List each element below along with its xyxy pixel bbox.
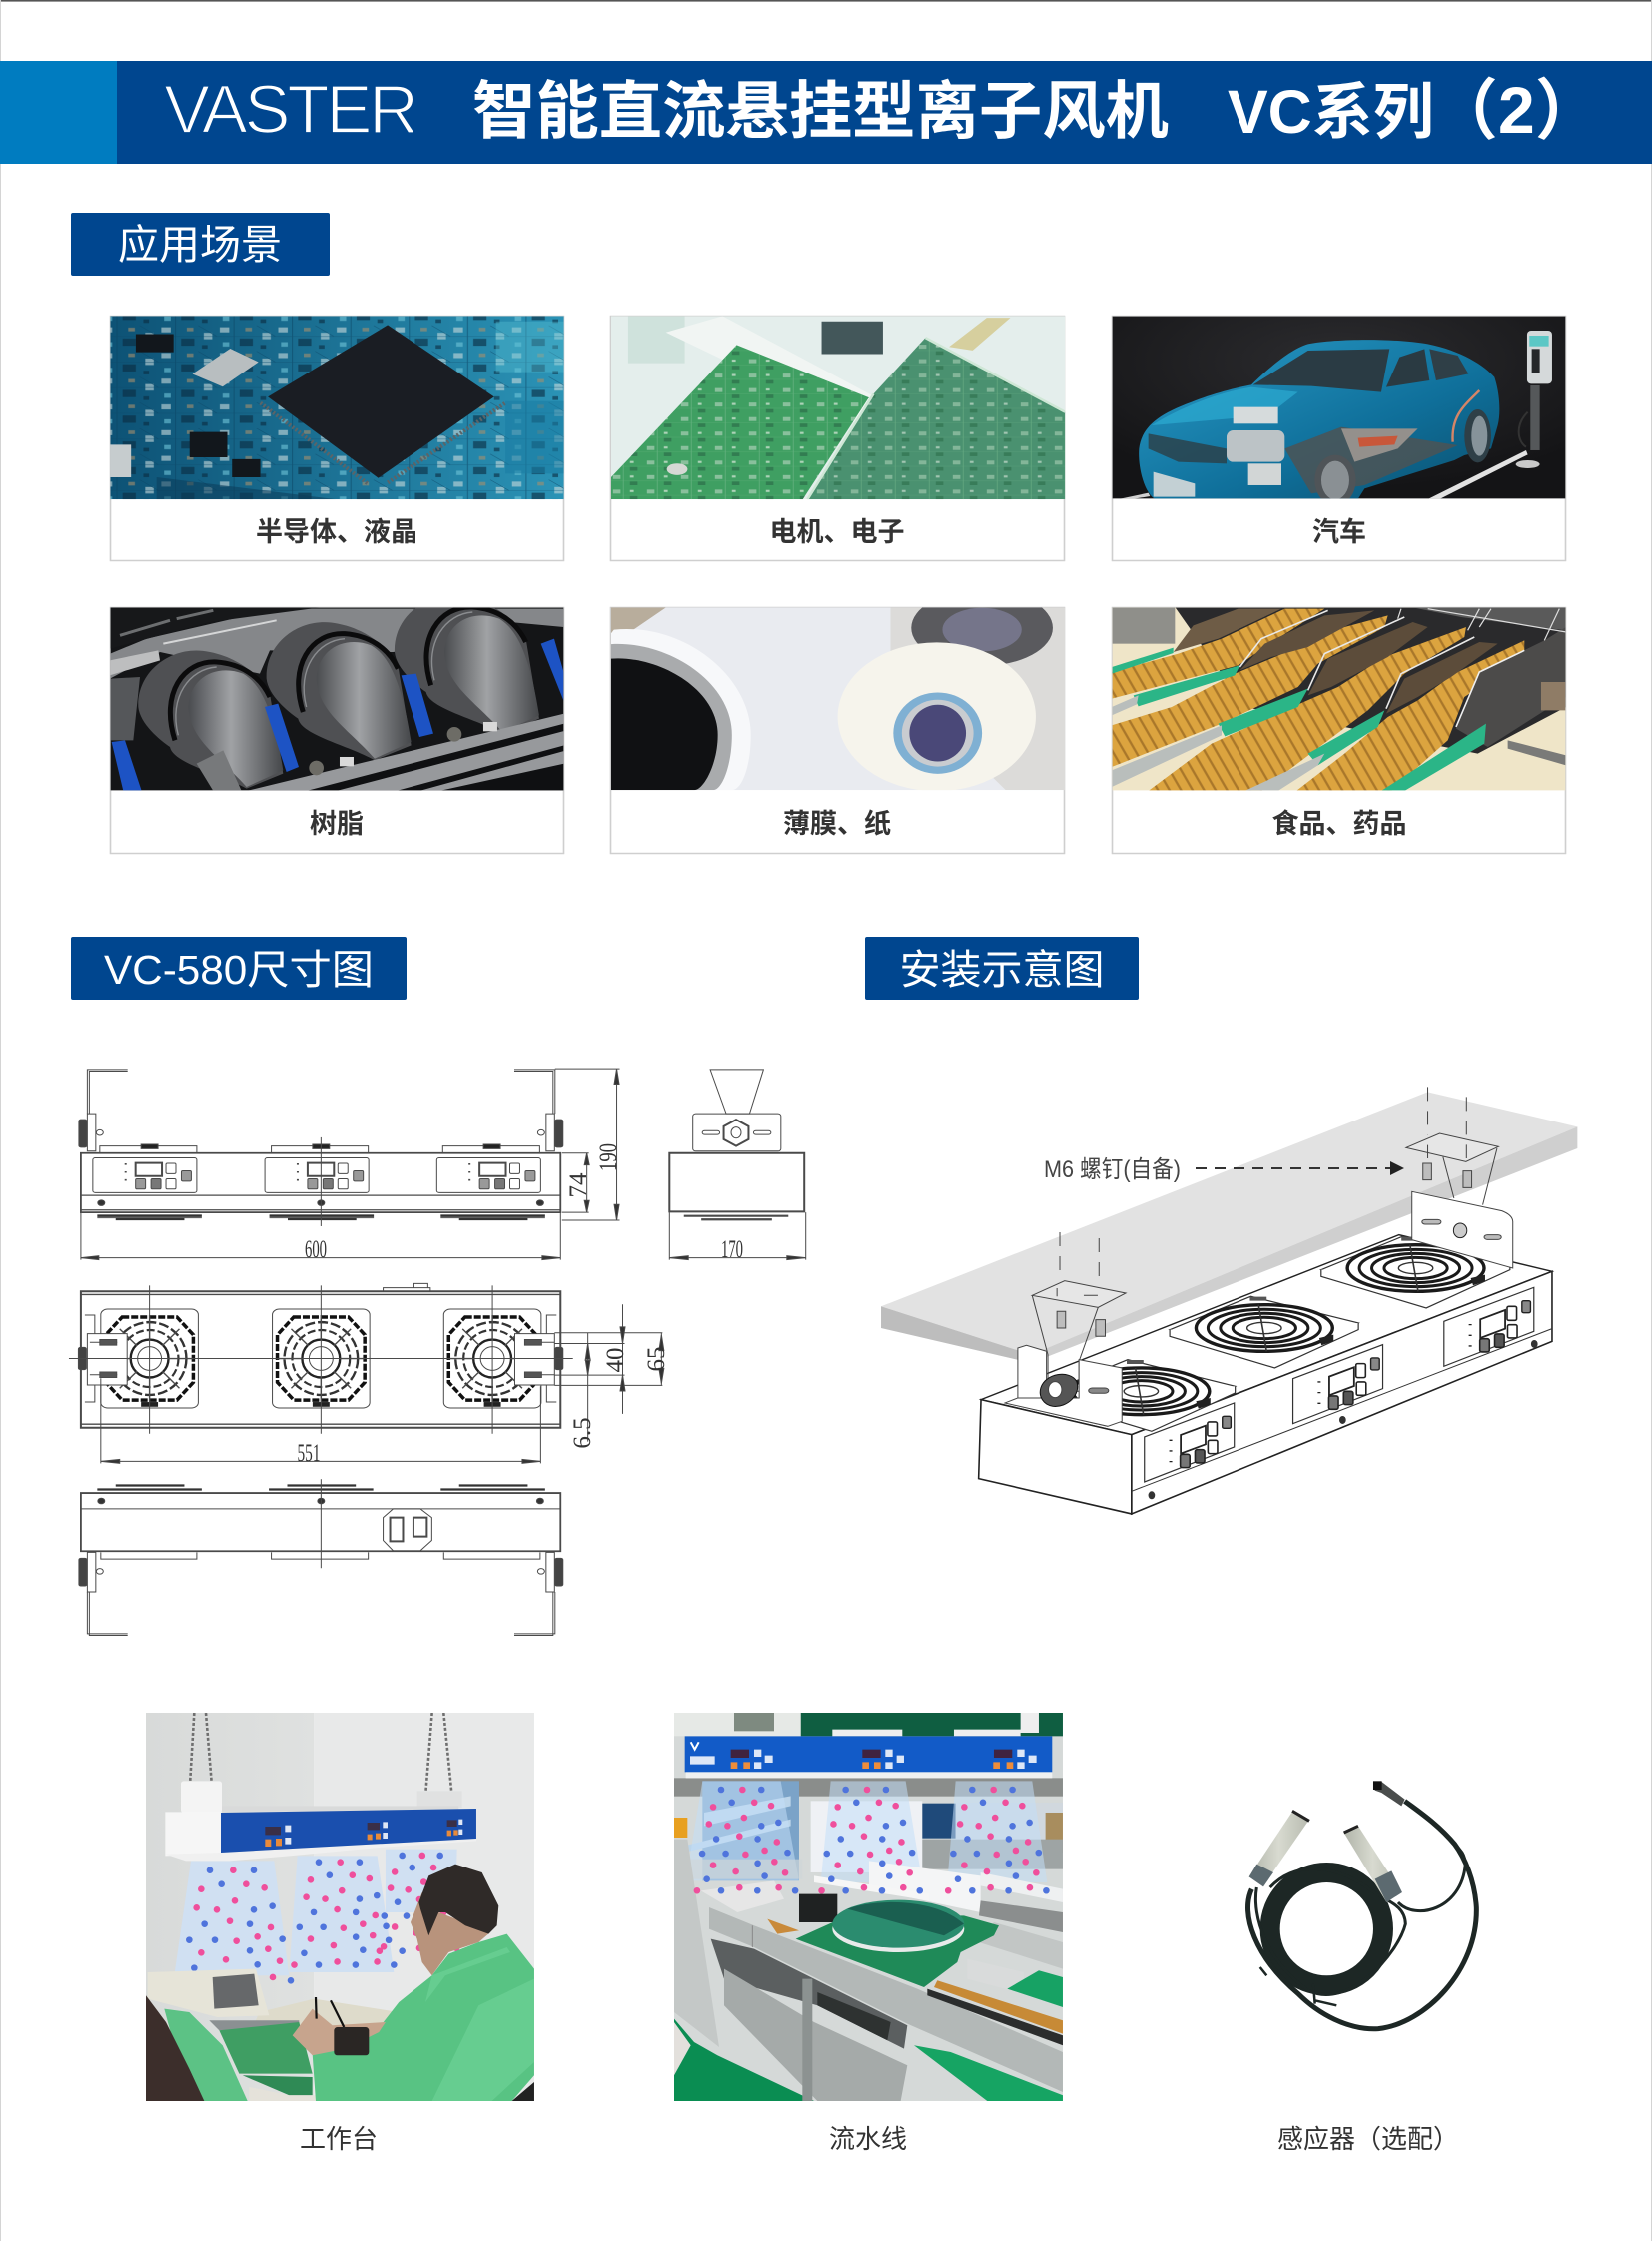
drawing: top view with fans: 551 (298, 1440, 320, 1467)
drawing: top view with fans: 65 (643, 1346, 670, 1372)
drawing: side view: 170 (721, 1236, 743, 1263)
heading: VC-580 尺寸图: VC-580尺寸图 (104, 947, 374, 993)
title banner: 智能直流悬挂型离子风机 (472, 77, 1169, 147)
label: 感应器（选配） (1277, 2124, 1459, 2154)
callout: M6 screw label and arrow: M6 螺钉(自备) (1044, 1156, 1181, 1183)
chart: installation diagram (881, 1087, 1577, 1514)
drawing: top view with fans: 6.5 (569, 1417, 596, 1449)
title banner (0, 61, 1652, 164)
photo: workbench application (146, 1713, 534, 2154)
photo: electric car cutaway (1112, 316, 1566, 505)
photo: circuit board with chip (110, 316, 564, 499)
label: 流水线 (829, 2124, 907, 2154)
photo: production line application (674, 1713, 1063, 2154)
card: motors and electronics (611, 316, 1065, 561)
heading: 安装示意图: 安装示意图 (899, 947, 1105, 993)
heading: 应用场景 (71, 213, 330, 276)
drawing: front view (79, 1069, 622, 1263)
callout: M6 screw label and arrow (1044, 1156, 1404, 1183)
card: semiconductor (110, 316, 564, 561)
device body with fans and control panels (979, 1235, 1552, 1514)
panel: application scenarios grid (110, 316, 1566, 853)
drawing: top view with fans (69, 1283, 670, 1467)
drawing: side view (669, 1070, 806, 1263)
card: food and medicine (1112, 607, 1566, 853)
photo: green circuit boards (611, 316, 1065, 499)
drawing: top view with fans: 40 (602, 1348, 629, 1372)
label: 工作台 (300, 2124, 378, 2154)
label: 汽车 (1312, 517, 1366, 547)
chart: VC-580 dimension drawing (69, 1069, 806, 1636)
ceiling slab (881, 1092, 1577, 1363)
label: 电机、电子 (769, 517, 905, 547)
photo: biscuit production line (1112, 607, 1566, 791)
label: 食品、药品 (1272, 809, 1406, 839)
mounting bracket: right (1406, 1087, 1513, 1268)
heading: 应用场景: 应用场景 (118, 222, 282, 268)
drawing: front view: 600 (305, 1236, 327, 1263)
photo: resin moulded pipes (110, 595, 564, 791)
label: 树脂 (310, 809, 364, 839)
card: resin (110, 595, 564, 853)
label: 半导体、液晶 (256, 517, 417, 547)
mounting bracket: left (1005, 1232, 1126, 1426)
drawing: front view: 190 (595, 1143, 622, 1171)
heading: 安装示意图 (865, 937, 1139, 1000)
drawing: front view: 74 (565, 1172, 592, 1198)
photo: film rolls (611, 590, 1065, 791)
label: 薄膜、纸 (783, 809, 891, 839)
drawing: rear view (79, 1479, 563, 1636)
title banner: VASTER (164, 71, 418, 148)
photo: optional sensor (1248, 1781, 1476, 2154)
title banner: VC系列 (1228, 78, 1434, 146)
card: film and paper (611, 590, 1065, 853)
title banner: （2） (1432, 73, 1601, 147)
heading: VC-580 尺寸图 (71, 937, 407, 1000)
card: automotive (1112, 316, 1566, 561)
